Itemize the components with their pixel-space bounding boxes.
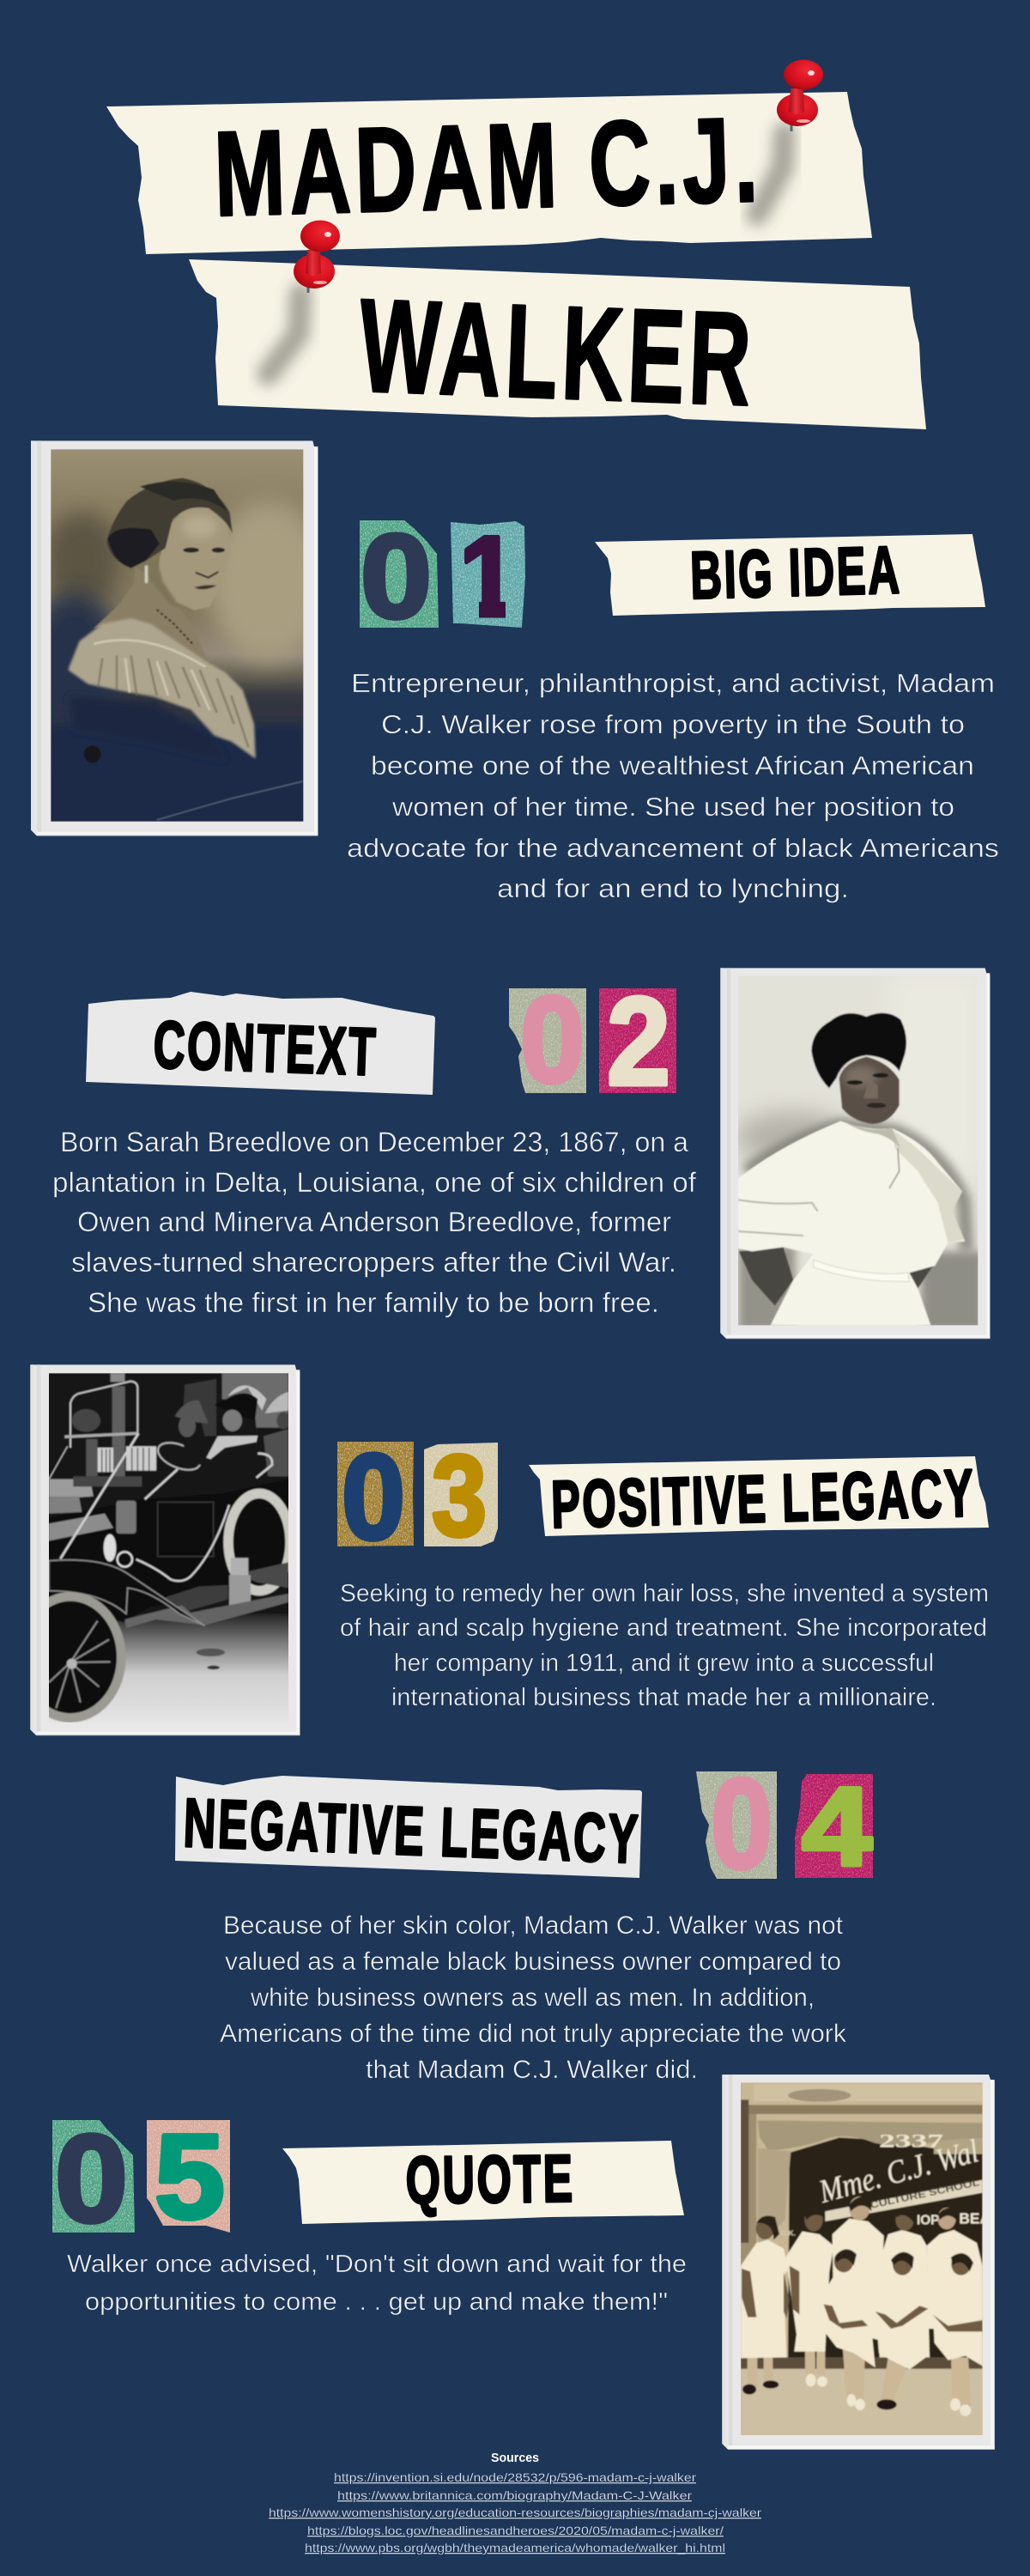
icon: red push pin left (294, 220, 340, 293)
text block: big idea: C.J. Walker rose from poverty in the South to (381, 709, 965, 739)
sign lettering in the photo: CULTURE SCHOOL (869, 2178, 981, 2211)
tile: digit 0: 0 (55, 2109, 128, 2248)
text block: negative legacy: Because of her skin color, Madam C.J. Walker was not (223, 1911, 843, 1940)
sign lettering in the photo: 2337 (879, 2129, 943, 2151)
heading: negative legacy torn paper: NEGATIVE LEGACY (182, 1784, 641, 1877)
sources links (269, 2470, 761, 2555)
section 05 number tiles (52, 2109, 230, 2248)
photo: portrait in white dress (720, 968, 990, 1339)
heading: context torn paper (86, 992, 435, 1095)
photo: Madam Walker driving a car (20, 1364, 300, 1735)
heading: big idea paper strip: BIG IDEA (689, 532, 902, 613)
sign lettering in the photo: IOP (917, 2213, 939, 2227)
staff women (741, 2196, 983, 2416)
tile: digit 0: 0 (520, 972, 585, 1109)
sources links: https://www.womenshistory.org/education-resources/biographies/madam-cj-walker (269, 2506, 761, 2519)
tile: digit 0: 0 (342, 1429, 405, 1565)
text block: positive legacy (340, 1580, 989, 1711)
title text line one: MADAM C.J. (213, 92, 764, 241)
pin shadow (268, 294, 300, 374)
tile: digit 5: 5 (154, 2109, 225, 2244)
text block: negative legacy: valued as a female black business owner compared to (225, 1947, 841, 1976)
text block: negative legacy: Americans of the time did not truly appreciate the work (220, 2020, 846, 2048)
heading: quote paper strip: QUOTE (405, 2141, 575, 2218)
title: paper strip MADAM C.J. (106, 92, 872, 254)
text block: positive legacy: Seeking to remedy her own hair loss, she invented a system (340, 1580, 989, 1607)
sign lettering in the photo (781, 2129, 991, 2238)
section 04 number tiles (696, 1752, 873, 1895)
tile: digit 0: 0 (711, 1752, 772, 1895)
section 02 number tiles (509, 971, 676, 1111)
text block: quote: opportunities to come . . . get up and make them!" (85, 2288, 668, 2316)
pin shadow (757, 133, 785, 215)
text block: negative legacy: that Madam C.J. Walker did. (366, 2056, 698, 2084)
text block: context: plantation in Delta, Louisiana, one of six children of (52, 1167, 696, 1198)
text block: big idea: women of her time. She used her position to (391, 792, 954, 822)
icon: red push pin top right (777, 60, 823, 131)
tile: digit 1: 1 (459, 513, 518, 641)
heading: negative legacy torn paper (175, 1776, 642, 1878)
text block: big idea: Entrepreneur, philanthropist, and activist, Madam (351, 668, 995, 698)
sign lettering in the photo: BEA (959, 2209, 991, 2227)
text block: context: Owen and Minerva Anderson Breedlove, former (77, 1206, 671, 1237)
text block: big idea: become one of the wealthiest African American (371, 750, 974, 781)
text block: context (52, 1127, 696, 1318)
text block: context: slaves-turned sharecroppers after the Civil War. (71, 1247, 676, 1278)
text block: big idea: and for an end to lynching. (497, 873, 849, 903)
sources links: https://www.pbs.org/wgbh/theymadeamerica/whomade/walker_hi.html (305, 2541, 725, 2555)
text block: negative legacy (220, 1911, 846, 2084)
text block: negative legacy: white business owners as well as men. In addition, (250, 1984, 815, 2012)
section 01 number tiles (360, 520, 525, 628)
heading: quote paper strip (282, 2141, 684, 2224)
heading: big idea paper strip (595, 532, 985, 616)
tile: digit 4: 4 (802, 1764, 872, 1889)
tile: digit 3: 3 (432, 1432, 487, 1560)
sources (269, 2451, 761, 2555)
text block: big idea: advocate for the advancement of black Americans (347, 833, 999, 863)
sign lettering in the photo: C.K. (781, 2229, 796, 2238)
tile: digit 2: 2 (607, 971, 670, 1111)
sources heading: Sources (491, 2451, 539, 2465)
sources links: https://invention.si.edu/node/28532/p/596-madam-c-j-walker (334, 2470, 696, 2484)
title text line two: WALKER (357, 271, 758, 434)
text block: context: Born Sarah Breedlove on December 23, 1867, on a (60, 1127, 688, 1157)
sources links: https://www.britannica.com/biography/Madam-C-J-Walker (337, 2488, 692, 2502)
text block: positive legacy: of hair and scalp hygiene and treatment. She incorporated (340, 1614, 987, 1642)
text block: positive legacy: her company in 1911, and it grew into a successful (394, 1649, 934, 1677)
text block: quote: Walker once advised, "Don't sit down and wait for the (67, 2251, 687, 2278)
photo: staff at Mme. C.J. Walker beauty school (722, 2075, 995, 2450)
text block: big idea (347, 668, 999, 903)
text block: quote (67, 2251, 687, 2316)
tile: digit 0: 0 (360, 510, 432, 643)
text block: positive legacy: international business that made her a millionaire. (391, 1684, 936, 1711)
heading: context torn paper: CONTEXT (152, 1006, 379, 1090)
text block: context: She was the first in her family to be born free. (88, 1287, 659, 1318)
sources links: https://blogs.loc.gov/headlinesandheroes/2020/05/madam-c-j-walker/ (307, 2524, 724, 2537)
section 03 number tiles (337, 1429, 498, 1565)
photo: portrait of Madam Walker in shawl (25, 440, 329, 836)
title: paper strip WALKER (189, 259, 926, 434)
sign lettering in the photo: Mme. C.J. Wal (815, 2133, 983, 2210)
